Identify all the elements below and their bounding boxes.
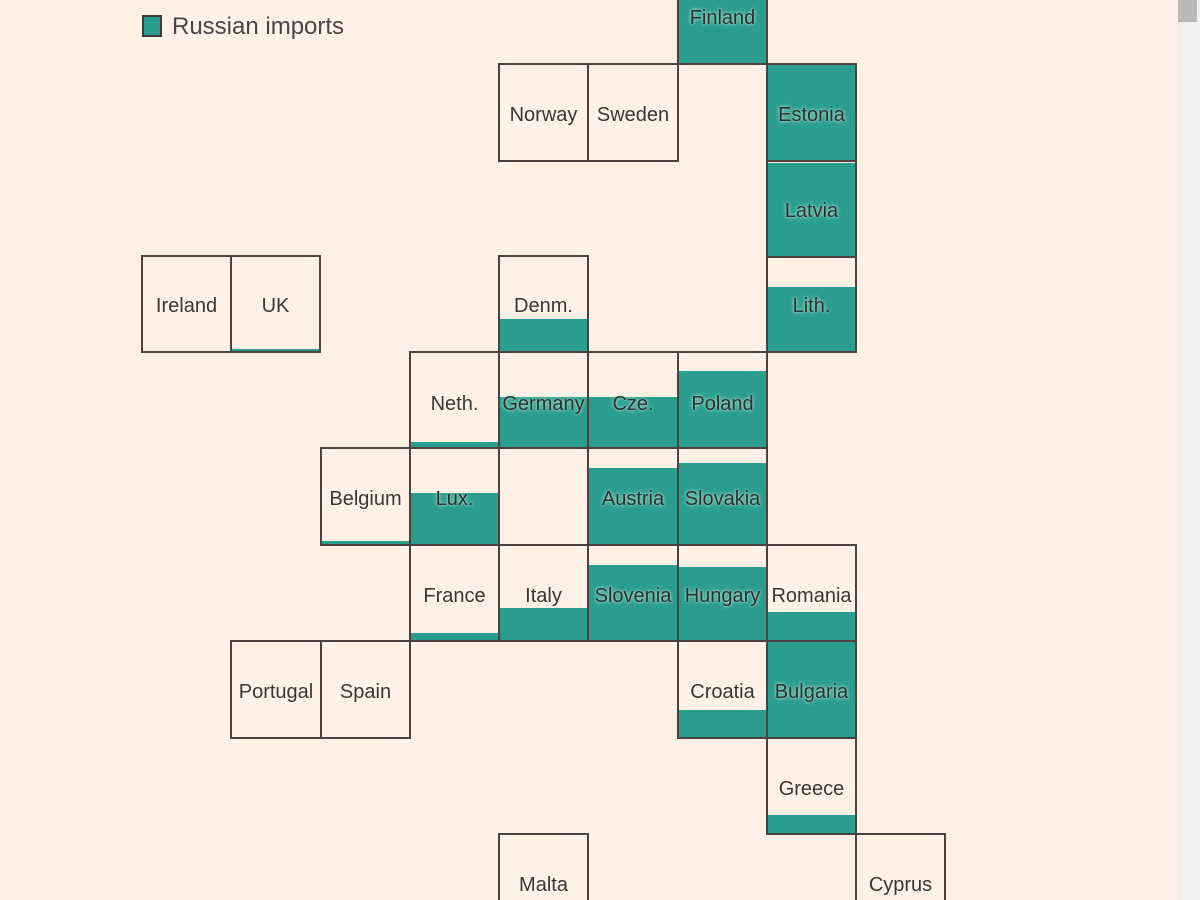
cell: Ireland: Ireland — [156, 295, 217, 317]
cell: Portugal: Portugal — [239, 681, 313, 703]
cell: Luxembourg — [409, 447, 500, 546]
cell: Belgium: Belgium — [329, 488, 402, 510]
cell: Cyprus — [855, 833, 946, 900]
cell: Sweden — [587, 63, 679, 162]
cell: UK: UK — [262, 295, 289, 317]
cell: Spain — [320, 640, 411, 739]
legend — [142, 13, 344, 40]
cell: Malta — [498, 833, 589, 900]
cell: Romania — [766, 544, 857, 642]
legend label: Russian imports — [172, 13, 344, 40]
cell: Latvia — [766, 160, 857, 258]
cell: Spain: Spain — [340, 681, 391, 703]
cell: Belgium — [320, 447, 411, 546]
cell: Bulgaria: Bulgaria — [775, 681, 848, 703]
cell: Hungary — [677, 544, 768, 642]
cell: Germany — [498, 351, 589, 449]
cell: Czechia: Cze. — [612, 393, 654, 415]
cell: Croatia — [677, 640, 768, 739]
cell: Romania: Romania — [771, 585, 852, 607]
cell: Denmark — [498, 255, 589, 353]
cell: Sweden: Sweden — [597, 104, 669, 126]
cell: Greece — [766, 737, 857, 835]
cell: Netherlands — [409, 351, 500, 449]
cell: Estonia — [766, 63, 857, 162]
cell: Greece: Greece — [779, 778, 844, 800]
cell: Luxembourg: Lux. — [436, 488, 473, 510]
cell: Slovenia: Slovenia — [595, 585, 671, 607]
cell: Slovakia: Slovakia — [685, 488, 760, 510]
cell: Slovakia — [677, 447, 768, 546]
cell: Estonia: Estonia — [778, 104, 845, 126]
cell: Denmark: Denm. — [514, 295, 573, 317]
cell: Lithuania: Lith. — [793, 295, 830, 317]
cell: Italy — [498, 544, 589, 642]
cell: Poland: Poland — [691, 393, 754, 415]
cell: Netherlands: Neth. — [431, 393, 478, 415]
cell: Finland: Finland — [690, 7, 755, 29]
cell: Bulgaria — [766, 640, 857, 739]
cell: Latvia: Latvia — [785, 200, 838, 222]
cell: Norway: Norway — [510, 104, 577, 126]
cell: Malta: Malta — [519, 874, 568, 896]
cell: Austria: Austria — [602, 488, 664, 510]
legend swatch — [142, 15, 162, 37]
cell: UK — [230, 255, 321, 353]
cell: Poland — [677, 351, 768, 449]
cell: Slovenia — [587, 544, 679, 642]
cell: Hungary: Hungary — [685, 585, 760, 607]
cell: Austria — [587, 447, 679, 546]
cell: Ireland — [141, 255, 232, 353]
cell: Cyprus: Cyprus — [869, 874, 932, 896]
cell: Portugal — [230, 640, 322, 739]
cell: Finland — [677, 0, 768, 65]
cell: Croatia: Croatia — [690, 681, 755, 703]
scrollbar thumb — [1178, 0, 1197, 22]
cell: France — [409, 544, 500, 642]
cell: Lithuania — [766, 256, 857, 353]
cell: Italy: Italy — [525, 585, 562, 607]
cell: Czechia — [587, 351, 679, 449]
cell: Germany: Germany — [502, 393, 585, 415]
scrollbar track — [1177, 0, 1200, 900]
cell: France: France — [423, 585, 486, 607]
cell: Norway — [498, 63, 589, 162]
